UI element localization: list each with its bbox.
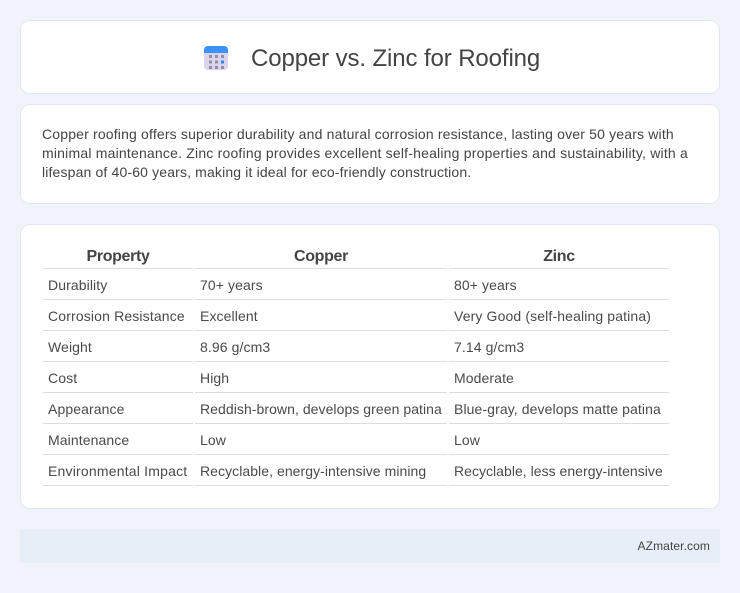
row: cost [48,370,514,386]
row: durability: 70+ years [200,277,263,293]
summary text: minimal maintenance. Zinc roofing provides excellent self-healing properties and sustainability, with a [42,145,688,161]
footer bar [20,529,720,563]
row: environmental impact: Recyclable, less energy-intensive [454,463,663,479]
table header [86,248,575,265]
row: durability [48,277,517,293]
row: appearance: Reddish-brown, develops green patina [200,401,442,417]
title: Copper vs. Zinc for Roofing [251,45,540,72]
row: corrosion resistance: Corrosion Resistance [48,308,185,324]
row: durability: Durability [48,277,107,293]
row: weight [48,339,524,355]
summary text: lifespan of 40-60 years, making it ideal for eco-friendly construction. [42,164,471,180]
summary text: Copper roofing offers superior durability and natural corrosion resistance, lasting over 50 years with [42,126,674,142]
row: environmental impact: Recyclable, energy-intensive mining [200,463,426,479]
comparison table panel [20,224,720,509]
footer credit: AZmater.com [638,539,710,553]
icon: calendar [204,46,228,70]
row: appearance [48,401,661,417]
table header: Property [86,248,150,265]
row: corrosion resistance: Very Good (self-healing patina) [454,308,651,324]
table header: Copper [294,248,348,265]
row: corrosion resistance [48,308,651,324]
row: environmental impact: Environmental Impact [48,463,187,479]
row: maintenance [48,432,480,448]
row: cost: High [200,370,229,386]
table header: Zinc [543,248,575,265]
row: durability: 80+ years [454,277,517,293]
row: appearance: Appearance [48,401,125,417]
row: weight: 7.14 g/cm3 [454,339,524,355]
row: environmental impact [48,463,663,479]
row: weight: 8.96 g/cm3 [200,339,270,355]
row: maintenance: Maintenance [48,432,129,448]
row: cost: Cost [48,370,77,386]
row: maintenance: Low [454,432,480,448]
summary panel [20,104,720,204]
table lines [43,268,669,486]
row: maintenance: Low [200,432,226,448]
row: weight: Weight [48,339,92,355]
summary text [42,126,688,180]
row: cost: Moderate [454,370,514,386]
row: corrosion resistance: Excellent [200,308,258,324]
header panel [20,20,720,94]
row: appearance: Blue-gray, develops matte patina [454,401,661,417]
